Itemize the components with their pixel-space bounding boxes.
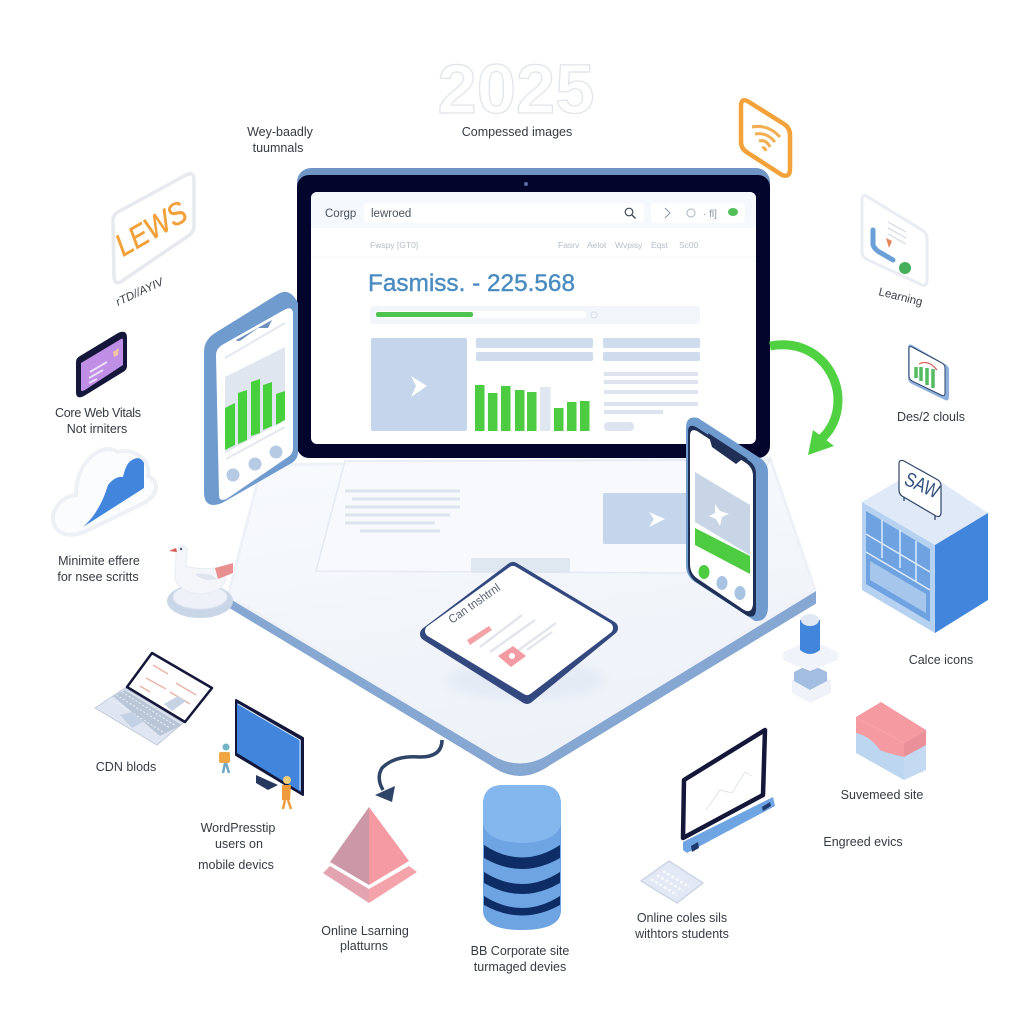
label: Core Web Vitals: Core Web Vitals <box>55 406 141 420</box>
label: Core Web Vitals: Not irniters <box>67 422 127 436</box>
person left <box>219 744 230 773</box>
tablet on platform: Can tnshtrnl <box>446 581 503 626</box>
label: Online coles sils: Online coles sils <box>637 911 727 925</box>
platform <box>228 458 815 775</box>
icon: pyramid <box>323 807 417 903</box>
label: CDN blods: CDN blods <box>96 760 156 774</box>
left phone <box>204 292 298 505</box>
label: Online Lsarning: Online Lsarning <box>321 924 409 938</box>
arrow: dark curved <box>375 740 442 802</box>
icon: learning card <box>862 196 927 285</box>
tablet on platform <box>427 569 611 700</box>
browser toolbar: Corgp <box>325 208 356 220</box>
label: Wey-baadly tuumnals: tuumnals <box>253 141 303 155</box>
icon: blue monitor with people <box>219 700 303 809</box>
content bars <box>476 338 700 361</box>
text lines <box>604 372 698 431</box>
nav row: Fwspy [GT0] <box>370 240 418 250</box>
label: Minimite effere: Minimite effere <box>58 554 140 568</box>
phone bars <box>225 379 285 450</box>
green bar chart <box>475 385 590 431</box>
server panel grid <box>866 511 930 622</box>
label: Core Web Vitals <box>55 406 141 436</box>
browser toolbar: · fl] <box>703 209 717 220</box>
icon: orange wifi card <box>741 100 790 176</box>
icon: purple card <box>76 332 127 397</box>
label: Suvemeed site: Suvemeed site <box>841 788 923 802</box>
nav row: Sc00 <box>679 240 699 250</box>
label: Wey-baadly tuumnals <box>247 125 314 155</box>
nav row: Eqst <box>651 240 669 250</box>
icon: cloud <box>53 449 156 535</box>
nav row: Fasrv <box>558 240 580 250</box>
label: WordPresstip: WordPresstip <box>201 821 275 835</box>
label: Engreed evics: Engreed evics <box>823 835 903 849</box>
keyboard <box>641 861 703 903</box>
progress bar <box>370 306 700 324</box>
icon: pink and blue block <box>856 702 926 780</box>
label: WordPresstip <box>198 821 275 872</box>
card: LEWS <box>109 174 194 283</box>
label: Des/2 clouls: Des/2 clouls <box>897 410 965 424</box>
label: Minimite effere: for nsee scritts <box>57 570 139 584</box>
icon: mini laptop <box>95 653 212 745</box>
title: 2025: 2025 <box>438 50 594 128</box>
icon: database cylinder <box>483 785 561 930</box>
SAW sign: SAW <box>901 468 943 503</box>
label: rTD//AYIV: rTD//AYIV <box>114 276 167 309</box>
icon: tablet on stand with keyboard <box>641 730 775 903</box>
label: Online Lsarning <box>321 924 409 953</box>
keyboard deck on platform <box>316 460 770 573</box>
nav row: Wvpisy <box>615 240 643 250</box>
label: Wey-baadly tuumnals: Wey-baadly <box>247 125 314 139</box>
icon: server pedestal <box>783 614 838 703</box>
label: BB Corporate site <box>471 944 569 974</box>
video thumbnail <box>371 338 467 431</box>
label: WordPresstip: users on <box>215 837 263 851</box>
label: Minimite effere <box>57 554 140 584</box>
green curved arrow <box>770 345 838 455</box>
icon: small chart card <box>908 344 949 400</box>
label: Learning: Learning <box>877 286 924 309</box>
label: WordPresstip: mobile devics <box>198 858 274 872</box>
right phone <box>686 417 768 621</box>
icon: goose on base <box>167 546 233 618</box>
person right <box>282 776 291 809</box>
label: BB Corporate site: turmaged devies <box>474 960 566 974</box>
nav row: Aelot <box>587 240 607 250</box>
label: Calce icons: Calce icons <box>909 653 973 667</box>
browser toolbar: lewroed <box>371 208 411 220</box>
label: Online Lsarning: platturns <box>340 939 388 953</box>
icon: SAW box <box>862 460 988 633</box>
nav row <box>370 240 699 250</box>
label: Online coles sils: withtors students <box>634 927 729 941</box>
headline figure: Fasmiss. - 225.568 <box>368 270 575 297</box>
label: Compessed images: Compessed images <box>462 125 572 139</box>
card: LEWS: LEWS <box>109 194 193 263</box>
label: BB Corporate site: BB Corporate site <box>471 944 569 958</box>
browser toolbar <box>325 203 745 223</box>
laptop monitor <box>297 168 770 458</box>
SAW sign <box>899 460 943 520</box>
browser screen <box>311 192 756 444</box>
label: Online coles sils <box>634 911 729 941</box>
